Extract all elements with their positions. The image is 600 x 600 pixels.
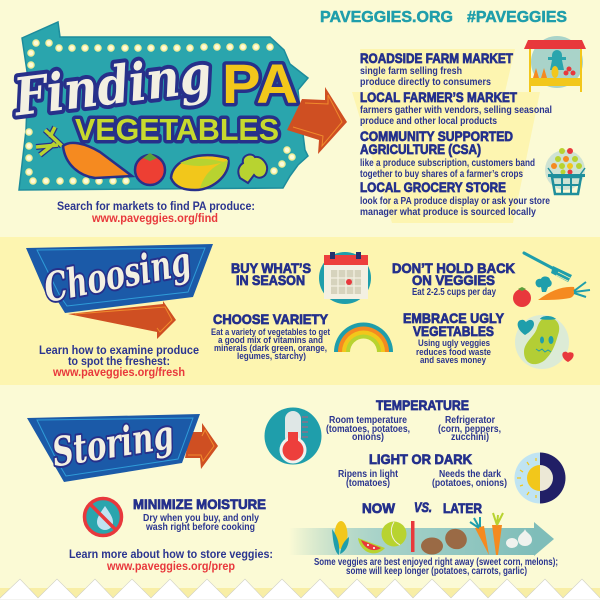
panel: storing: [27, 397, 566, 577]
community supported agriculture: AGRICULTURE (CSA): [360, 141, 481, 157]
temperature text: (corn, peppers,: [438, 423, 501, 435]
tip: embrace ugly vegetables: [403, 310, 505, 366]
Pennsylvania map shape: [19, 22, 308, 190]
community supported agriculture: together to buy shares of a farmer’s crops: [360, 168, 523, 180]
temperature text: onions): [352, 431, 384, 443]
timeline vegetables: [332, 513, 532, 555]
link text: prep: [69, 549, 273, 573]
light or dark text: (tomatoes): [346, 477, 390, 489]
tip: embrace ugly vegetables: Using ugly veggies: [418, 338, 490, 349]
tip: embrace ugly vegetables: VEGETABLES: [413, 323, 494, 339]
tip: don't hold back: ON VEGGIES: [412, 272, 495, 288]
choosing band background: [0, 237, 600, 385]
temperature text: [326, 397, 501, 443]
storing banner: [27, 414, 200, 482]
title: Finding: Finding: [9, 44, 215, 129]
arrow pointing to market list: [287, 87, 347, 154]
now vs later heading: NOW: [362, 500, 396, 516]
local farmer's market: [360, 89, 552, 127]
timeline caption: some will keep longer (potatoes, carrots, garlic): [346, 565, 527, 577]
light or dark text: Needs the dark: [439, 468, 501, 480]
storing arrow: [185, 423, 218, 469]
now vs later heading: VS.: [414, 499, 432, 515]
tip: don't hold back: Eat 2-2.5 cups per day: [412, 286, 496, 298]
title: Vegetables: VEGETABLES: [75, 112, 279, 147]
tip: don't hold back: DON’T HOLD BACK: [392, 260, 515, 276]
panel: choosing: [0, 237, 600, 385]
icon: cabbage: [382, 522, 406, 546]
header: website and hashtag: [320, 9, 567, 26]
icon: broccoli: [238, 155, 267, 183]
roadside farm market: produce directly to consumers: [360, 76, 491, 88]
icon: fork with vegetables: [513, 253, 590, 307]
light or dark text: Ripens in light: [338, 468, 398, 480]
choosing banner: [26, 244, 213, 313]
timeline arrow: [289, 522, 554, 556]
tip: buy in season: BUY WHAT’S: [231, 260, 311, 276]
link text: fresh: [39, 345, 199, 379]
title: PA: PA: [222, 52, 298, 115]
link text: fresh: Learn how to examine produce: [39, 345, 199, 357]
tip: choose variety: CHOOSE VARIETY: [213, 311, 329, 327]
highlight shapes behind market list: [352, 49, 540, 223]
tip: choose variety: Eat a variety of vegetables to get: [211, 327, 330, 337]
icon: calendar: [319, 252, 371, 304]
temperature text: Refrigerator: [445, 414, 495, 426]
header: website and hashtag: #PAVEGGIES: [467, 9, 567, 26]
roadside farm market: [360, 50, 513, 88]
title badge: Pennsylvania sign: [9, 22, 347, 225]
icon: carrot: [36, 127, 132, 178]
link text: prep: Learn more about how to store veggies:: [69, 549, 273, 561]
tip: buy in season: IN SEASON: [236, 272, 305, 288]
roadside farm market: single farm selling fresh: [360, 65, 462, 77]
tip: choose variety: a good mix of vitamins and: [218, 335, 323, 345]
local farmer's market: produce and other local products: [360, 115, 497, 127]
icon: corn: [332, 521, 349, 555]
local grocery store: manager what produce is sourced locally: [360, 206, 536, 218]
link text: search for markets: Search for markets to find PA produce:: [57, 201, 255, 213]
choosing arrow: [68, 301, 176, 339]
temperature text: zucchini): [451, 431, 489, 443]
community supported agriculture: [360, 128, 535, 180]
link text: fresh: to spot the freshest:: [68, 356, 170, 368]
temperature text: (tomatoes, potatoes,: [326, 423, 410, 435]
tip: embrace ugly vegetables: and saves money: [420, 355, 487, 366]
tip: choose variety: legumes, starchy): [237, 351, 306, 361]
link text: search for markets: [57, 201, 255, 225]
now vs later heading: [362, 499, 482, 516]
icon: rainbow: [334, 322, 393, 352]
tip: choose variety: minerals (dark green, orange,: [214, 343, 327, 353]
temperature text: TEMPERATURE: [376, 397, 469, 413]
icon: no water: [84, 498, 122, 536]
marquee lights: [26, 40, 295, 184]
local grocery store: [360, 179, 550, 218]
tip: embrace ugly vegetables: EMBRACE UGLY: [403, 310, 505, 326]
tip: embrace ugly vegetables: reduces food waste: [416, 347, 491, 358]
link text: fresh: www.paveggies.org/fresh: [52, 367, 185, 379]
now vs later heading: LATER: [443, 500, 482, 516]
icon: sun and dark half circle: [514, 452, 566, 504]
icon: watermelon: [358, 538, 385, 553]
local farmer's market: farmers gather with vendors, selling seasonal: [360, 104, 552, 116]
tip: minimize moisture: Dry when you buy, and only: [143, 512, 259, 524]
light or dark text: [338, 451, 507, 489]
icon: tomato: [135, 153, 165, 185]
local grocery store: look for a PA produce display or ask your store: [360, 195, 550, 207]
link text: prep: www.paveggies.org/prep: [106, 561, 235, 573]
community supported agriculture: COMMUNITY SUPPORTED: [360, 128, 513, 144]
light or dark text: LIGHT OR DARK: [369, 451, 472, 467]
heading: Storing: Storing: [49, 411, 177, 476]
icon: market stall: [524, 36, 586, 92]
header: website and hashtag: PAVEGGIES.ORG: [320, 9, 453, 26]
timeline caption: [314, 556, 558, 577]
divider bar: [411, 521, 414, 552]
tip: minimize moisture: wash right before cooking: [145, 521, 255, 533]
tip: minimize moisture: MINIMIZE MOISTURE: [133, 496, 266, 512]
icon: thermometer: [264, 408, 322, 464]
tip: minimize moisture: [84, 496, 266, 536]
heading: Choosing: Choosing: [40, 238, 195, 312]
tip: choose variety: [211, 311, 330, 361]
icon: corn: [171, 155, 229, 190]
local farmer's market: LOCAL FARMER’S MARKET: [360, 89, 517, 105]
roadside farm market: ROADSIDE FARM MARKET: [360, 50, 513, 66]
torn bottom edge: [0, 579, 600, 600]
temperature text: Room temperature: [329, 414, 407, 426]
community supported agriculture: like a produce subscription, customers band: [360, 157, 535, 169]
link text: search for markets: www.paveggies.org/find: [91, 213, 218, 225]
icon: ugly eggplant with hearts: [515, 315, 574, 369]
local grocery store: LOCAL GROCERY STORE: [360, 179, 506, 195]
icon: carrots: [470, 513, 503, 555]
icon: garlic: [506, 529, 532, 548]
light or dark text: (potatoes, onions): [432, 477, 507, 489]
icon: produce basket: [545, 148, 585, 194]
tip: buy in season: [231, 260, 311, 288]
panel: market types: [352, 36, 586, 223]
icon: potatoes: [421, 525, 470, 554]
tip: don't hold back: [392, 260, 515, 298]
